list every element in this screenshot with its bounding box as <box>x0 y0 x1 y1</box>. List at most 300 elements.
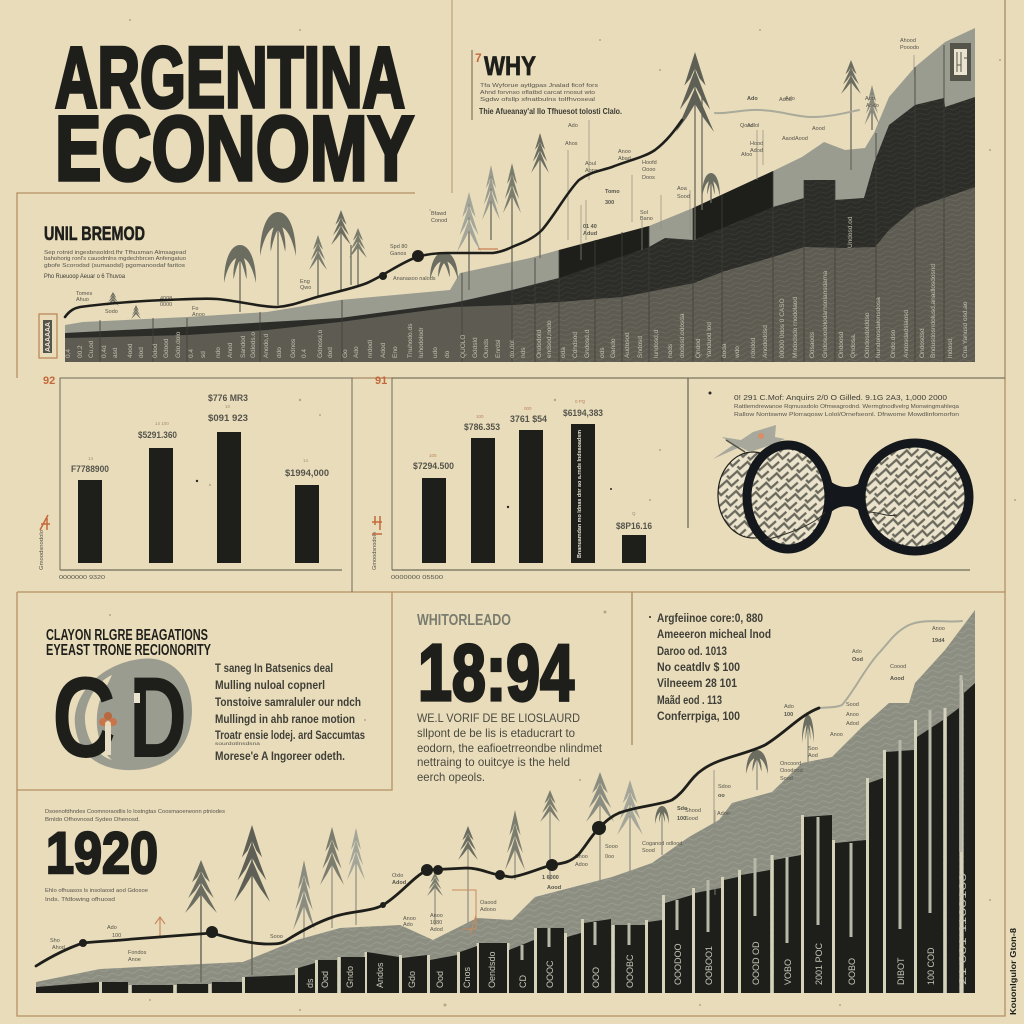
stat list: Vilneeem 28 101 <box>657 678 738 690</box>
axis captions: Gmoodsnodolo <box>39 530 45 570</box>
bar labels <box>413 399 652 531</box>
vertical data labels: OOOBC <box>625 954 635 988</box>
small annotations: bottom chart: Adoo <box>575 862 588 868</box>
small annotations: bottom chart: Sooo <box>605 844 618 850</box>
vertical data labels: OOOC <box>545 960 555 988</box>
small annotations: bottom chart: Ado <box>784 704 794 710</box>
crack marks <box>765 512 897 540</box>
panel: 18:94 statistic: WE.L VORIF DE BE LIOSLAURD <box>417 711 580 725</box>
vertical data labels: Mndodsdo rnodolaod <box>792 297 799 358</box>
section: 1920: Dsoenofdhndes Coomnoraodlis lo lostngtas Coosmaoeneonn ptniodes <box>45 809 225 815</box>
vertical data labels: Cnos <box>462 966 472 988</box>
vertical data labels: Cu,od <box>88 340 95 358</box>
caption: Rallow Nontswnw Plorraqosw Lolol/Ornefseonl. Dfnwome Mowdlinfomorfon <box>734 412 959 418</box>
small annotations: bottom chart: Ado <box>852 649 862 655</box>
section: 1920 <box>45 809 225 903</box>
caption: 0! 291 C.Mof: Anquirs 2/0 O Gilled. 9.1G 2A3, 1,000 2000 <box>734 395 947 402</box>
small annotations: bottom chart: Sood <box>846 702 859 708</box>
bar labels: $8P16.16 <box>616 521 652 531</box>
small annotations: top chart: Sodo <box>105 309 118 315</box>
stat list: Ameeeron micheal lnod <box>657 629 771 641</box>
small annotations: bottom chart: Fondos <box>128 950 147 956</box>
small annotations: bottom chart: Anoo <box>846 712 859 718</box>
title: ARGENTINA <box>55 30 405 126</box>
bar labels: 10 <box>225 404 231 409</box>
small annotations: bottom chart: Coood <box>890 664 906 670</box>
small annotations: top chart: Ahood <box>900 38 916 44</box>
small annotations: top chart: Eng <box>300 279 310 285</box>
vertical data labels: OOBO <box>847 958 857 985</box>
vertical data labels: dod <box>138 347 145 358</box>
axis captions: Gmoodsnodolo <box>372 532 378 570</box>
icon: corner box <box>950 43 971 81</box>
bar labels: Q <box>632 511 636 516</box>
panel: 18:94 statistic: eodorn, the eafioetrreondbe nlindmet <box>417 741 603 755</box>
axis captions: 0000000 05500 <box>391 575 443 581</box>
vertical data labels: Gdood <box>163 338 170 358</box>
small annotations: bottom chart: Sood <box>780 776 793 782</box>
vertical data labels: ddo <box>276 347 283 358</box>
section: 1920: Bmldo Ofhovnosd Sydeo Dhenosd. <box>45 817 141 823</box>
bar labels: $1994,000 <box>285 468 329 478</box>
small annotations: bottom chart: Adoo <box>717 811 730 817</box>
vertical data labels: ods <box>599 347 606 358</box>
section: unil bremod: Pho Rueuoop Aeuar o 6 Thuvoa <box>44 274 126 280</box>
vertical data labels: 00.2 <box>77 345 84 358</box>
section: 1920: 1920 <box>46 821 158 886</box>
panel: bar chart 92 <box>39 375 352 592</box>
stat list: Daroo od. 1013 <box>657 646 727 658</box>
small annotations: bottom chart: Aood <box>547 885 561 891</box>
caption: Rattlemdrewanoe Rqmussdolo Ofmwagrodnd. Wermgtnodlvelrg Monwingmahleqa <box>734 404 960 410</box>
vertical data labels: Sandod <box>240 335 247 358</box>
small annotations: top chart: Afoo <box>741 152 752 158</box>
small annotations: top chart: Doos <box>642 175 655 181</box>
small annotations: bottom chart: Sho <box>50 938 60 944</box>
section: why <box>475 51 622 116</box>
trees: bottom chart <box>155 715 814 982</box>
stat list <box>657 613 771 723</box>
icon: flower key <box>99 712 117 755</box>
small annotations: top chart: 4008 <box>160 296 172 302</box>
vertical data labels: Gdo <box>407 971 417 988</box>
bars <box>422 424 646 563</box>
stat list: No ceatdlv $ 100 <box>657 662 740 674</box>
section: unil bremod: UNIL BREMOD <box>44 224 145 245</box>
section: why: WHY <box>484 51 536 81</box>
bar labels: $6194,383 <box>563 408 603 418</box>
vertical data labels: 100 COD <box>926 947 936 985</box>
vertical data labels: do <box>444 350 451 358</box>
small annotations: top chart: Fo <box>192 306 198 312</box>
small annotations: bottom chart: Ood <box>852 657 863 663</box>
heading: CLAYON RLGRE BEAGATIONS <box>46 627 208 644</box>
vertical data labels: Iuhodolodr <box>418 326 425 358</box>
panel: bar chart 91: Bnanuamdan mo Idnas dnr ao a.rnds Indsaoadsm <box>577 429 583 558</box>
vertical data labels <box>65 216 969 359</box>
small annotations: bottom chart: Ado <box>403 922 413 928</box>
vertical data labels: 0,4d <box>101 345 108 358</box>
vertical data labels: 0,4 <box>65 349 72 358</box>
small annotations: top chart: Aood <box>812 126 825 132</box>
signature: Kouonlgulor Gton-8 <box>1009 927 1018 1015</box>
vertical data labels: wdo <box>734 346 741 359</box>
vertical data labels: Cna Yanusd osd.ao <box>962 301 969 358</box>
vertical data labels <box>305 873 968 988</box>
vertical data labels: OOBOO1 <box>704 946 714 985</box>
vertical data labels: Audosod <box>624 332 631 358</box>
title: ECONOMY <box>55 98 414 200</box>
small annotations: top chart: Ananasoo nalods <box>393 276 436 282</box>
small annotations: bottom chart: Oxlo <box>392 873 403 879</box>
panel: 18:94 statistic: eerch opeols. <box>417 770 485 784</box>
section: 1920: Inds. Tfdlowing ofhuosd <box>45 897 115 903</box>
vertical data labels: Nundolosdalonsdosa <box>875 297 882 358</box>
vertical data labels: Gando <box>610 338 617 358</box>
bar labels: 14 <box>303 458 309 463</box>
logo: CD <box>52 654 192 782</box>
small annotations: top chart: Ado <box>568 123 578 129</box>
vertical data labels: OOO <box>591 967 601 988</box>
vertical data labels: endsod,nodo <box>546 320 553 358</box>
small annotations: bottom chart: Sdoo <box>718 784 731 790</box>
small annotations: top chart: Pooodo <box>900 45 919 51</box>
small annotations: bottom chart: Sooo <box>270 934 283 940</box>
vertical data labels: Undosd.od <box>847 216 854 248</box>
section: why: Ahnd forvnso oflatbd carcat rnosut wto <box>480 90 595 96</box>
small annotations: top chart: Sol <box>640 210 648 216</box>
section: why: 7 <box>475 51 482 65</box>
vertical data labels: Anodo,d <box>263 333 270 358</box>
small annotations: top chart: Ganos <box>390 251 406 257</box>
small annotations: bottom chart: 100 <box>677 816 686 822</box>
axis captions <box>372 516 443 581</box>
black bars <box>36 683 975 993</box>
layer: light gray <box>65 28 975 362</box>
small annotations: bottom chart: Ooodood <box>780 768 803 774</box>
small annotations: top chart: Ado <box>785 96 795 102</box>
panel: clayon logo and list <box>46 627 365 782</box>
vertical data labels: CD <box>518 975 528 988</box>
small annotations: top chart: 300 <box>605 200 614 206</box>
vertical data labels: Gddsld <box>472 337 479 358</box>
small annotations: top chart: Adlol <box>747 123 759 129</box>
vertical data labels: Qndod <box>695 338 702 358</box>
vertical data labels: Gndosd.d <box>584 329 591 358</box>
small annotations: top chart: Adud <box>583 231 597 237</box>
bar labels: 3761 $54 <box>510 414 547 424</box>
caption <box>734 395 960 418</box>
vertical data labels: ndo <box>215 347 222 358</box>
feature list: Mullingd in ahb ranoe motion <box>215 714 355 726</box>
small annotations: top chart: Aoa <box>677 186 688 192</box>
panel: 18:94 statistic: nettraing to ouitcye is the held <box>417 755 570 769</box>
small annotations: top chart: Qood <box>740 123 753 129</box>
small annotations: top chart: Abul <box>585 161 596 167</box>
small annotations: bottom chart: Anoe <box>128 957 141 963</box>
panel: 18:94 statistic <box>417 612 603 784</box>
chart icon: legend box: AAAAAA <box>45 322 52 352</box>
small annotations: top chart: Oooo <box>642 167 655 173</box>
vertical data labels: 0dod <box>152 343 159 358</box>
section: why: Thie Afueanay'al Ilo Tfhuesot tolosti Clalo. <box>479 106 622 116</box>
small annotations: top chart: Sood <box>677 194 690 200</box>
small annotations: bottom chart: Coganod odlood <box>642 841 682 847</box>
small annotations: top chart: Aood <box>795 136 808 142</box>
small annotations: top chart: Tomes <box>76 291 92 297</box>
vertical data labels: Enrdsl <box>495 339 502 358</box>
vertical data labels: ds <box>305 978 315 988</box>
axis captions <box>39 515 105 581</box>
feature list: sourdotlnsdsna <box>215 741 261 746</box>
icon: star <box>713 425 785 459</box>
logo: CD: D <box>129 654 187 782</box>
vertical data labels: Ondoosd <box>838 331 845 358</box>
small annotations: top chart: Abna <box>585 168 599 174</box>
bar labels: $7294.500 <box>413 461 454 471</box>
small annotations: bottom chart: Ahod <box>52 945 65 951</box>
small annotations: top chart: Abad <box>618 156 631 162</box>
vertical data labels: dod <box>327 347 334 358</box>
vertical data labels: nods <box>667 343 674 358</box>
small annotations: top chart: Anoo <box>192 312 205 318</box>
stat list: Maãd eod . 113 <box>657 695 722 707</box>
vertical data labels: Sndosd <box>637 336 644 358</box>
top area chart <box>39 28 975 362</box>
small annotations: bottom chart: Anoo <box>430 913 443 919</box>
feature list: T saneg In Batsenics deal <box>215 663 333 675</box>
vertical data labels: OOODOO <box>673 943 683 985</box>
section: unil bremod: gbofe Scorodsd (sumaodsl) pgomanoodaf faritos <box>44 263 185 269</box>
bar labels: $776 MR3 <box>208 393 248 403</box>
vertical data labels: Andosdadslaosd <box>903 310 910 358</box>
section: why: Sgdw ofsllp sfnatbulns tolfhvoseal <box>480 97 595 103</box>
small annotations: bottom chart: Soo <box>808 746 818 752</box>
small annotations: top chart: Anoo <box>618 149 631 155</box>
panel: 18:94 statistic: sllpont de be lis is etaducrart to <box>417 726 575 740</box>
small annotations: bottom chart <box>50 626 945 963</box>
vertical data labels: Ood <box>320 971 330 988</box>
small annotations: bottom chart: Shoo <box>575 854 588 860</box>
vertical data labels: Gdo.dolo <box>175 331 182 358</box>
vertical data labels: Ood <box>435 971 445 988</box>
small annotations: top chart: Hood <box>750 141 763 147</box>
small annotations: top chart: Ado <box>747 96 758 102</box>
panel: 18:94 statistic: 18:94 <box>418 628 574 717</box>
bar gaps <box>100 680 962 993</box>
small annotations: top chart <box>76 38 919 318</box>
vertical data labels: dodosd.odosda <box>679 313 686 358</box>
small annotations: top chart: Aaod <box>782 136 795 142</box>
vertical data labels: sd <box>200 351 207 358</box>
bar labels: $5291.360 <box>138 430 177 440</box>
vertical data labels: Ado <box>353 346 360 358</box>
section: unil bremod: bahohorig ronl's cauodmlns mgdechbrcen Anfengatuo <box>44 256 186 262</box>
vertical data labels: Qndosa. <box>850 333 857 358</box>
title <box>55 30 414 200</box>
vertical data labels: udo <box>432 347 439 358</box>
vertical data labels: Eno <box>392 346 399 358</box>
section: 1920: Ehlo ofhuasos ls insolaosd aod Gdosoe <box>45 888 148 894</box>
trees: top chart <box>107 52 880 319</box>
bar labels: 14 100 <box>155 421 169 426</box>
chart icon: legend box <box>39 314 57 358</box>
vertical data labels: VOBO <box>783 959 793 985</box>
bar labels <box>71 393 329 478</box>
line: trend to 1990s <box>65 110 859 317</box>
layer: black blocks <box>559 171 773 282</box>
vertical data labels: OOOD OD <box>751 941 761 985</box>
vertical data labels: do.dol <box>509 340 516 358</box>
bar labels: F7788900 <box>71 464 109 474</box>
small annotations: top chart: Ahuo <box>76 297 89 303</box>
vertical data labels: asd <box>112 347 119 358</box>
panel: glasses illustration <box>713 395 969 551</box>
small annotations: bottom chart: 1 6000 <box>542 875 559 881</box>
vertical data labels: Adod <box>380 342 387 358</box>
bar labels: 100 <box>476 414 484 419</box>
vertical data labels: Odndosdolddso <box>864 312 871 358</box>
panel: 18:94 statistic: WHITORLEADO <box>417 612 511 629</box>
stat list: Argfeiinoe core:0, 880 <box>657 613 763 625</box>
small annotations: bottom chart: 1080 <box>430 920 442 926</box>
small annotations: bottom chart: Shood <box>685 808 701 814</box>
bars <box>78 432 319 563</box>
heading: EYEAST TRONE RECIONORITY <box>46 642 211 659</box>
vertical data labels: Oendsdo <box>487 951 497 988</box>
small annotations: bottom chart: oo <box>718 793 725 799</box>
vertical data labels: 4ood <box>127 343 134 358</box>
vertical data labels: Yanduod lod <box>706 322 713 358</box>
small annotations: bottom chart: Anoo <box>830 732 843 738</box>
panel: bar chart 92: 92 <box>43 375 55 387</box>
panel: bar chart 91: 91 <box>375 375 387 387</box>
layer: gray hill <box>36 610 975 993</box>
small annotations: bottom chart: Ado <box>107 925 117 931</box>
vertical data labels: 00000 0dos 0 CASO <box>779 298 786 358</box>
section: unil bremod: Sep rotnid ingesbnsoldrd.fhr Tfhusman Almsagead <box>44 250 186 256</box>
small annotations: bottom chart: Oaood <box>480 900 497 906</box>
bottom area chart <box>36 610 975 993</box>
small annotations: top chart: Adod <box>779 97 792 103</box>
vertical data labels: 2001 POC <box>814 942 824 985</box>
glasses frame <box>747 443 969 551</box>
vertical data labels: Anod <box>227 342 234 358</box>
small annotations: bottom chart: Sood <box>642 848 655 854</box>
vertical data labels: Ondodold <box>536 329 543 358</box>
vertical data labels: Ondo.dso <box>890 329 897 358</box>
small annotations: top chart: Adod <box>750 148 763 154</box>
feature list <box>215 663 365 763</box>
small annotations: bottom chart: Sood <box>685 816 698 822</box>
bar labels: $091 923 <box>208 413 248 423</box>
vertical data labels: Odsaods <box>809 331 816 358</box>
feature list: Troatr ensie lodej. ard Saccumtas <box>215 730 365 742</box>
small annotations: bottom chart: Aod <box>808 753 818 759</box>
section: why: Tfa Wyforue aytlgpas Jnalad ficof fors <box>480 83 598 89</box>
vertical data labels: 21 001 1100100 <box>958 873 968 985</box>
logo: CD: C <box>52 654 116 782</box>
vertical data labels: nds <box>520 347 527 358</box>
feature list: Morese'e A Ingoreer odeth. <box>215 751 345 763</box>
bar labels: 0 PQ <box>575 399 586 404</box>
small annotations: top chart: 01 40 <box>583 224 597 230</box>
small annotations: bottom chart: 19d4 <box>932 638 945 644</box>
axis captions: 0000000 9320 <box>59 575 105 581</box>
small annotations: top chart: Ahos <box>565 141 578 147</box>
back circle <box>718 452 788 538</box>
vertical data labels: lundosd,d <box>653 329 660 358</box>
vertical data labels: Bndusdosndolusd.anadlosdosnd <box>930 264 937 358</box>
small annotations: top chart: Conod <box>431 218 447 224</box>
vertical data labels: nrdodl <box>367 339 374 358</box>
bar labels: 000 <box>524 406 532 411</box>
bar labels: 14 <box>88 456 94 461</box>
small annotations: bottom chart: Oncoord <box>780 761 801 767</box>
small annotations: bottom chart: Adooo <box>480 907 496 913</box>
small annotations: bottom chart: Anoo <box>932 626 945 632</box>
panel: bar chart 91 <box>372 375 1005 581</box>
heading <box>46 627 211 659</box>
small annotations: bottom chart: Adod <box>846 721 859 727</box>
vertical data labels: Gdnosd,o <box>317 329 324 358</box>
vertical data labels: Ondosdsd <box>919 328 926 358</box>
vertical data labels: lndosd, <box>947 337 954 358</box>
vertical data labels: 0.4 <box>188 349 195 358</box>
bar labels: 100 <box>429 453 437 458</box>
small annotations: top chart: Bano <box>640 216 653 222</box>
layer: dark gray base <box>65 187 975 362</box>
vertical data labels: rdodod <box>750 337 757 358</box>
light slits <box>522 675 961 960</box>
small annotations: top chart: Aoo <box>865 96 875 102</box>
small annotations: top chart: Tomo <box>605 189 620 195</box>
feature list: Mulling nuloal copnerl <box>215 680 325 692</box>
small annotations: bottom chart: Anoo <box>403 916 416 922</box>
small annotations: top chart: Aodo <box>866 103 879 109</box>
vertical data labels: Andos <box>375 962 385 988</box>
vertical data labels: Gdiods.o <box>250 332 257 358</box>
stat list: Conferrpiga, 100 <box>657 711 740 723</box>
small annotations: top chart: Bfawd <box>431 211 446 217</box>
vertical data labels: DIBOT <box>896 957 906 985</box>
small annotations: bottom chart: Adod <box>392 880 406 886</box>
small annotations: bottom chart: 100 <box>784 712 793 718</box>
chart dividers <box>100 45 944 362</box>
small annotations: top chart: Qwo <box>300 285 311 291</box>
small annotations: bottom chart: Adod <box>430 927 443 933</box>
vertical data labels: Anododdsd <box>762 325 769 358</box>
small annotations: bottom chart: 0oo <box>605 854 614 860</box>
small annotations: bottom chart: Aood <box>890 676 904 682</box>
small annotations: top chart: Spd 80 <box>390 244 407 250</box>
vertical data labels: Go <box>342 349 349 358</box>
section: unil bremod <box>44 224 186 280</box>
vertical data labels: Ounds <box>483 338 490 358</box>
vertical data labels: Gdnos <box>290 338 297 358</box>
vertical data labels: Gndo <box>345 966 355 988</box>
small annotations: top chart: 0000 <box>160 302 172 308</box>
small annotations: bottom chart: 100 <box>112 933 121 939</box>
vertical data labels: 0.4 <box>301 349 308 358</box>
vertical data labels: Cdndsod <box>572 332 579 358</box>
vertical data labels: doda <box>721 343 728 358</box>
vertical data labels: Gndosuodolodarnsolansdarna <box>822 271 829 358</box>
bar labels: $786.353 <box>464 422 500 432</box>
feature list: Tonstoive samraluler our ndch <box>215 697 361 709</box>
vertical data labels: Tnuhodo.ds <box>407 323 414 358</box>
vertical data labels: QUOLO <box>460 335 467 358</box>
